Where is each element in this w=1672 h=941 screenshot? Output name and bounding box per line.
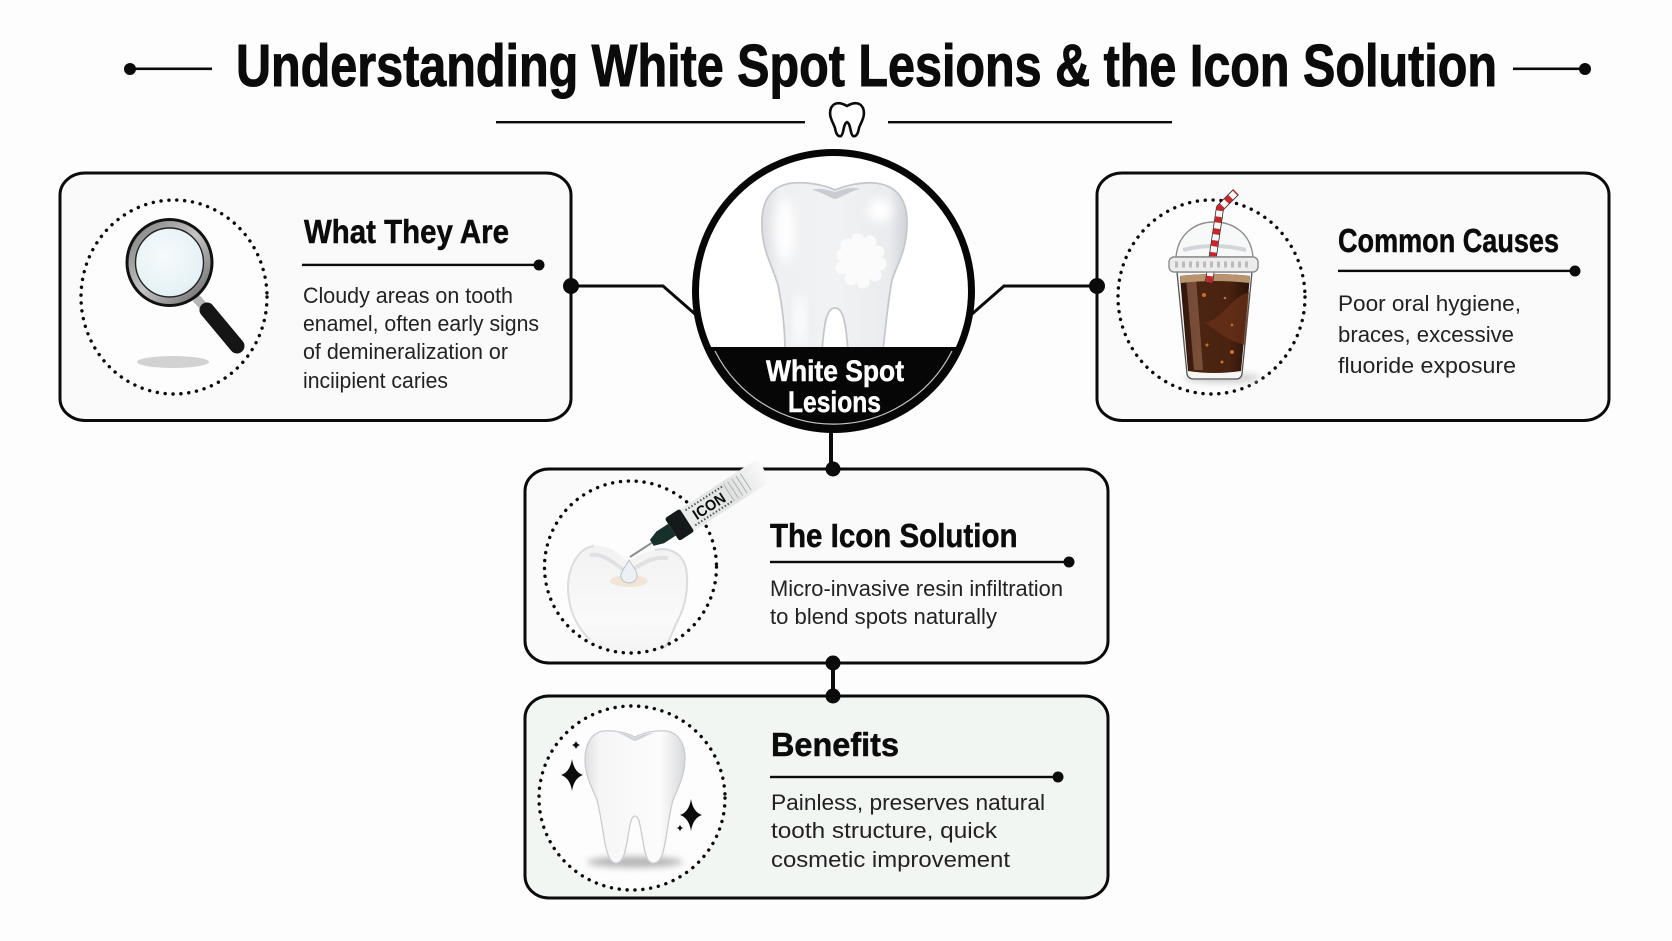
panel: the icon solution (525, 459, 1108, 663)
icon: sparkles (561, 741, 702, 832)
text: description: fluoride exposure (1338, 353, 1516, 378)
text: description (303, 283, 539, 393)
heading: common causes: Common Causes (1338, 222, 1559, 259)
text: description: to blend spots naturally (770, 604, 998, 629)
icon: healthy tooth with sparkles (539, 706, 725, 890)
text: description (771, 790, 1045, 872)
icon: magnifying glass (81, 200, 267, 394)
panel: common causes (1097, 173, 1609, 420)
title divider with tooth icon (496, 103, 1172, 136)
icon: syringe applying resin to tooth (544, 459, 772, 653)
text: description: Cloudy areas on tooth (303, 283, 513, 308)
label: white spot lesions (766, 355, 904, 419)
text: description: Micro-invasive resin infiltration (770, 576, 1063, 601)
icon: tooth with white spot (762, 183, 907, 350)
central hub: white spot lesions (692, 149, 975, 433)
text: description: Poor oral hygiene, (1338, 291, 1521, 316)
heading: benefits: Benefits (771, 726, 899, 763)
text: description: cosmetic improvement (771, 847, 1011, 872)
heading rule (1338, 266, 1580, 276)
connector dot: common causes (1089, 278, 1105, 294)
panel: what they are (60, 173, 571, 420)
heading rule (770, 772, 1064, 782)
heading: what they are: What They Are (304, 213, 509, 250)
text: description: inciipient caries (303, 368, 448, 393)
text: description: tooth structure, quick (771, 818, 998, 843)
panel: benefits (525, 696, 1108, 898)
label: white spot lesions: Lesions (788, 386, 881, 419)
text: description: Painless, preserves natural (771, 790, 1045, 815)
heading: the icon solution: The Icon Solution (770, 517, 1018, 554)
heading rule (302, 260, 544, 270)
text: description: enamel, often early signs (303, 311, 539, 336)
text: description (1338, 291, 1521, 378)
label band (711, 347, 956, 426)
heading rule (770, 556, 1074, 568)
text: description (770, 576, 1063, 629)
thin band highlight (715, 351, 952, 424)
text: description: braces, excessive (1338, 322, 1514, 347)
icon: syringe applying resin to tooth: ICON (690, 490, 729, 524)
label: white spot lesions: White Spot (766, 355, 904, 388)
connectors: hub to panels (571, 286, 1097, 696)
icon: soda cup (1118, 192, 1305, 394)
text: description: of demineralization or (303, 339, 508, 364)
connector dot: what they are (563, 278, 579, 294)
connector dots: centre column (826, 462, 840, 704)
